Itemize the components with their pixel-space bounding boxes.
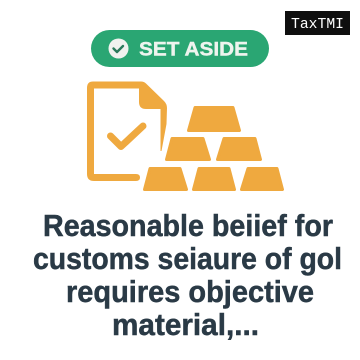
gold bar: middle right bbox=[218, 138, 260, 160]
icon: document with check mark bbox=[87, 82, 167, 181]
badge: TaxTMI watermark bbox=[285, 11, 350, 35]
title: material,... bbox=[112, 308, 259, 342]
gold bar: bottom right bbox=[242, 168, 282, 190]
badge: TaxTMI watermark: TaxTMI bbox=[291, 16, 344, 33]
icon: check circle bbox=[108, 38, 128, 58]
gold bar: top bbox=[188, 108, 240, 130]
check mark bbox=[110, 126, 143, 146]
title: customs seiaure of gol bbox=[33, 242, 342, 276]
gold bar: middle left bbox=[166, 138, 210, 160]
status pill: set aside bbox=[91, 30, 269, 67]
title: requires objective bbox=[66, 275, 314, 309]
gold bar: bottom left bbox=[144, 168, 186, 190]
icon: stacked gold bars bbox=[144, 108, 282, 190]
title: Reasonable beiief for bbox=[43, 209, 333, 243]
pill label: SET ASIDE bbox=[139, 40, 248, 60]
gold bar: bottom middle bbox=[194, 168, 234, 190]
title bbox=[33, 209, 342, 342]
